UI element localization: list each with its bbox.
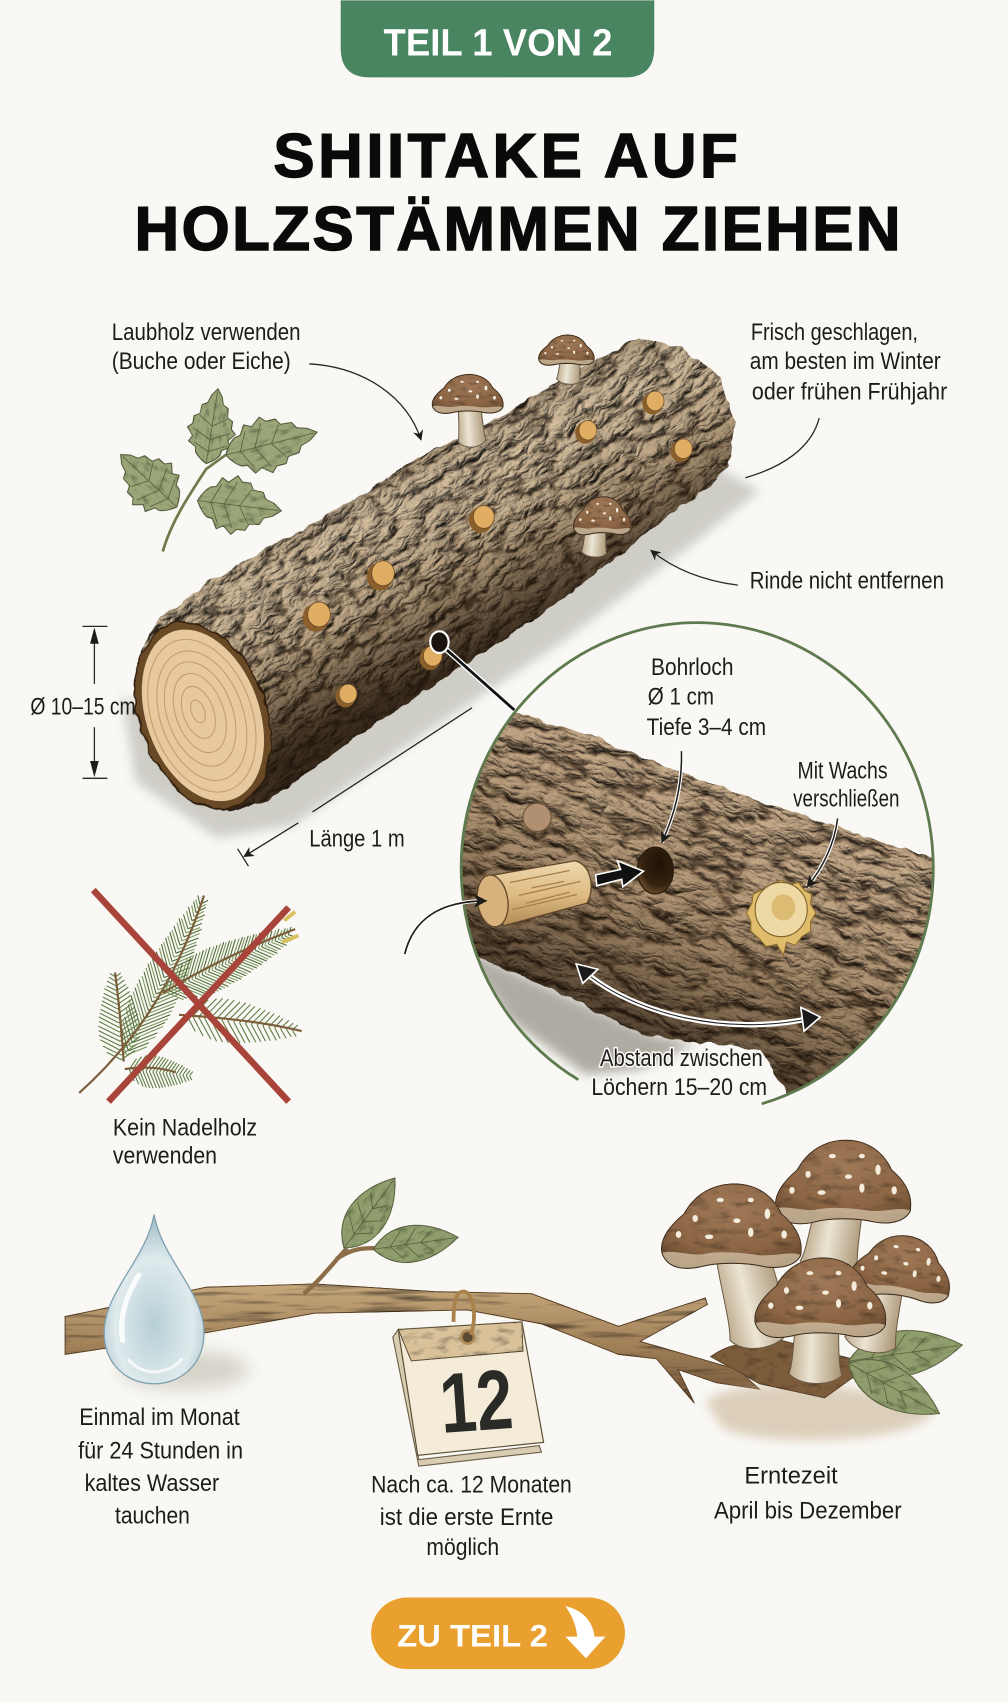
detail circle: close-up of log	[403, 621, 935, 1106]
icon: down arrow	[565, 1606, 605, 1658]
illustration: main log with mushrooms and plugs	[119, 334, 760, 842]
wax seal	[747, 880, 816, 955]
mushroom on log, top	[539, 335, 594, 385]
label: drill hole	[647, 654, 766, 741]
label: freshly cut: Frisch geschlagen,	[751, 319, 918, 346]
front mushroom	[755, 1258, 886, 1384]
title: HOLZSTÄMMEN ZIEHEN	[135, 195, 901, 264]
label: first harvest: ist die erste Ernte	[380, 1504, 553, 1531]
label: drill hole: Tiefe 3–4 cm	[647, 714, 766, 741]
log ground shadow	[122, 467, 760, 838]
arrow: keep bark to log	[651, 550, 738, 585]
label: first harvest: Nach ca. 12 Monaten	[371, 1471, 572, 1498]
label: first harvest	[371, 1471, 572, 1561]
label: no softwood: verwenden	[113, 1142, 217, 1169]
button: to part 2: ZU TEIL 2	[397, 1618, 548, 1653]
title	[135, 122, 901, 264]
drilled hole	[637, 847, 673, 894]
icon: tear-off calendar: 12	[437, 1351, 516, 1451]
label: hardwood	[112, 319, 301, 375]
conifer needles	[95, 888, 303, 1092]
label: hardwood: (Buche oder Eiche)	[112, 348, 291, 375]
label: wax: verschließen	[793, 786, 899, 813]
label: wax: Mit Wachs	[798, 757, 888, 784]
illustration: branch timeline	[65, 1166, 760, 1403]
inoculation plugs	[303, 391, 692, 707]
pointer from log to close-up	[430, 631, 514, 710]
illustration: oak leaf sprig	[101, 385, 324, 552]
ground stain	[705, 1384, 933, 1440]
small plug in bark	[523, 803, 551, 831]
dimension: diameter: Ø 10–15 cm	[30, 693, 136, 720]
mushroom on log, middle	[432, 374, 503, 448]
arrow: to dowel	[405, 901, 486, 954]
close-up ground shadow	[461, 950, 694, 1075]
branch leaves	[328, 1166, 461, 1267]
header tab: part indicator: TEIL 1 VON 2	[384, 23, 613, 65]
dimension: diameter	[30, 626, 136, 778]
label: drill hole: Bohrloch	[651, 654, 733, 681]
label: spacing: Abstand zwischen	[600, 1045, 763, 1072]
label: keep bark: Rinde nicht entfernen	[750, 567, 944, 594]
double arrow: hole spacing	[576, 964, 820, 1031]
red cross	[93, 890, 289, 1102]
conifer stems	[79, 895, 302, 1093]
right mushroom	[843, 1229, 956, 1357]
illustration: crossed-out conifer branch	[79, 888, 303, 1102]
label: harvest season: Erntezeit	[744, 1463, 838, 1490]
icon: tear-off calendar	[393, 1292, 544, 1466]
label: drill hole: Ø 1 cm	[648, 684, 714, 711]
label: harvest season	[714, 1463, 902, 1524]
mushroom on log, lower	[573, 497, 631, 558]
arrow: hardwood to log	[309, 364, 421, 440]
illustration: shiitake cluster	[661, 1140, 966, 1440]
label: soak: tauchen	[115, 1503, 190, 1530]
title: SHIITAKE AUF	[273, 122, 738, 191]
label: soak: für 24 Stunden in	[78, 1438, 243, 1465]
label: freshly cut: am besten im Winter	[750, 348, 941, 375]
icon: water drop	[104, 1214, 250, 1389]
label: soak	[78, 1404, 243, 1530]
label: spacing	[591, 1045, 767, 1101]
dimension: length: Länge 1 m	[309, 826, 405, 853]
leaves at base	[839, 1322, 966, 1432]
label: spacing: Löchern 15–20 cm	[591, 1074, 767, 1101]
wooden dowel	[474, 861, 591, 929]
close-up bark	[462, 712, 932, 1094]
label: freshly cut	[750, 319, 947, 406]
header tab: part indicator	[341, 0, 654, 77]
label: freshly cut: oder frühen Frühjahr	[752, 379, 947, 406]
log cut face with rings	[111, 603, 295, 828]
arrow: to wax	[807, 818, 838, 887]
back mushroom	[775, 1140, 911, 1280]
label: harvest season: April bis Dezember	[714, 1497, 902, 1524]
arrow: to hole	[662, 751, 681, 842]
label: no softwood: Kein Nadelholz	[113, 1114, 257, 1141]
calendar ring	[454, 1292, 474, 1344]
left mushroom	[661, 1184, 801, 1355]
circle outline	[461, 623, 933, 1104]
label: soak: kaltes Wasser	[85, 1470, 219, 1497]
label: wax	[793, 757, 899, 813]
label: hardwood: Laubholz verwenden	[112, 319, 301, 346]
button: to part 2	[371, 1598, 625, 1669]
label: soak: Einmal im Monat	[79, 1404, 240, 1431]
dimension: length	[238, 708, 472, 866]
label: no softwood	[113, 1114, 257, 1169]
arrow: freshly cut to log	[745, 418, 819, 478]
arrow: dowel into hole	[596, 861, 643, 887]
label: first harvest: möglich	[426, 1534, 499, 1561]
log bark body	[140, 338, 736, 812]
